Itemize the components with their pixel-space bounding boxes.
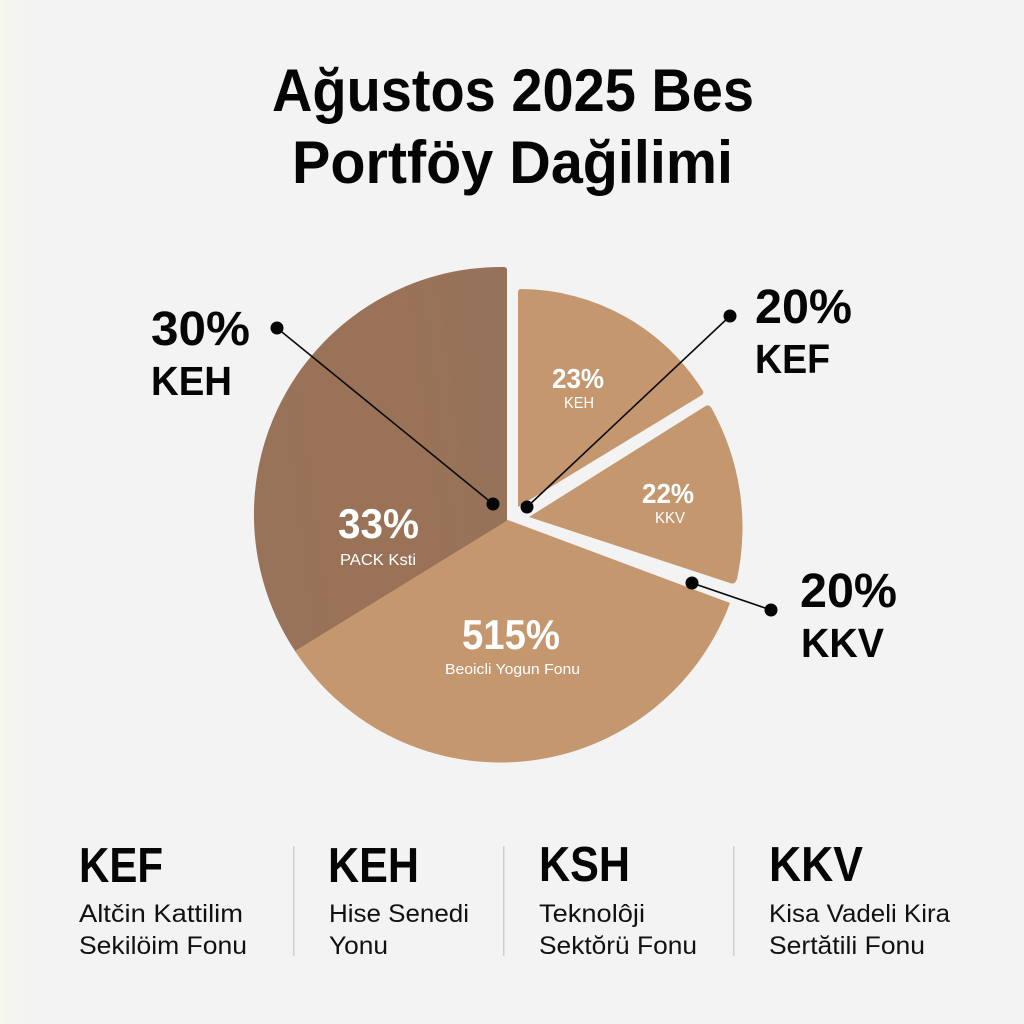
inner label: 22%	[642, 478, 694, 527]
callout: 20% KKV: 20%	[800, 565, 897, 618]
legend: KEF: Sekilöim Fonu	[79, 932, 247, 960]
legend: KEH: Hise Senedi	[329, 900, 469, 928]
legend: KKV: Sertătili Fonu	[769, 932, 925, 960]
legend: KSH: KSH	[539, 838, 630, 892]
callout: 30% KEH: 30%	[151, 303, 250, 356]
legend: KSH: Sektŏrü Fonu	[539, 932, 697, 960]
callout: 20% KEF: KEF	[755, 336, 830, 382]
legend: KEF: Altčin Kattilim	[79, 900, 243, 928]
legend: KEH: KEH	[328, 839, 419, 893]
legend: KEF: KEF	[79, 839, 163, 893]
legend: KKV	[769, 838, 950, 960]
callout: 20% KEF	[755, 281, 852, 382]
slice: upper right 23%	[518, 289, 703, 507]
title: Portföy Dağilimi	[292, 129, 733, 196]
inner label: 23%: 23%	[552, 363, 604, 394]
inner label: 22%: KKV	[655, 510, 685, 527]
leader line: 20% KKV	[686, 576, 778, 616]
inner label: 515%: 515%	[462, 611, 560, 658]
inner label: 23%	[552, 363, 604, 412]
callout: 20% KEF: 20%	[755, 281, 852, 334]
callout: 30% KEH: KEH	[151, 358, 232, 404]
inner label: 23%: KEH	[564, 395, 594, 412]
callout: 20% KKV: KKV	[801, 620, 885, 666]
inner label: 515%: Beoicli Yogun Fonu	[445, 661, 580, 678]
callout: 30% KEH	[151, 303, 250, 404]
inner label: 515%	[445, 611, 580, 678]
legend: KEH	[328, 839, 469, 960]
slice: brown 33%	[254, 267, 507, 652]
leader line: 20% KEF	[520, 310, 736, 514]
legend: KKV: Kisa Vadeli Kira	[769, 900, 950, 928]
slice: right 22%	[529, 405, 742, 584]
legend: KEH: Yonu	[329, 932, 388, 960]
leader line: 30% KEH	[270, 322, 500, 510]
title: Ağustos 2025 Bes	[272, 57, 754, 124]
inner label: 22%: 22%	[642, 478, 694, 509]
inner label: 33%	[338, 500, 419, 569]
legend: KSH	[539, 838, 697, 960]
pie chart	[254, 267, 742, 762]
legend: KSH: Teknolôji	[539, 900, 645, 928]
slice: large tan 515%	[295, 520, 730, 762]
callout: 20% KKV	[800, 565, 897, 666]
title	[272, 57, 754, 196]
inner label: 33%: PACK Ksti	[340, 552, 416, 569]
inner label: 33%: 33%	[338, 500, 419, 547]
legend: KKV: KKV	[769, 838, 863, 892]
legend: KEF	[79, 839, 247, 960]
